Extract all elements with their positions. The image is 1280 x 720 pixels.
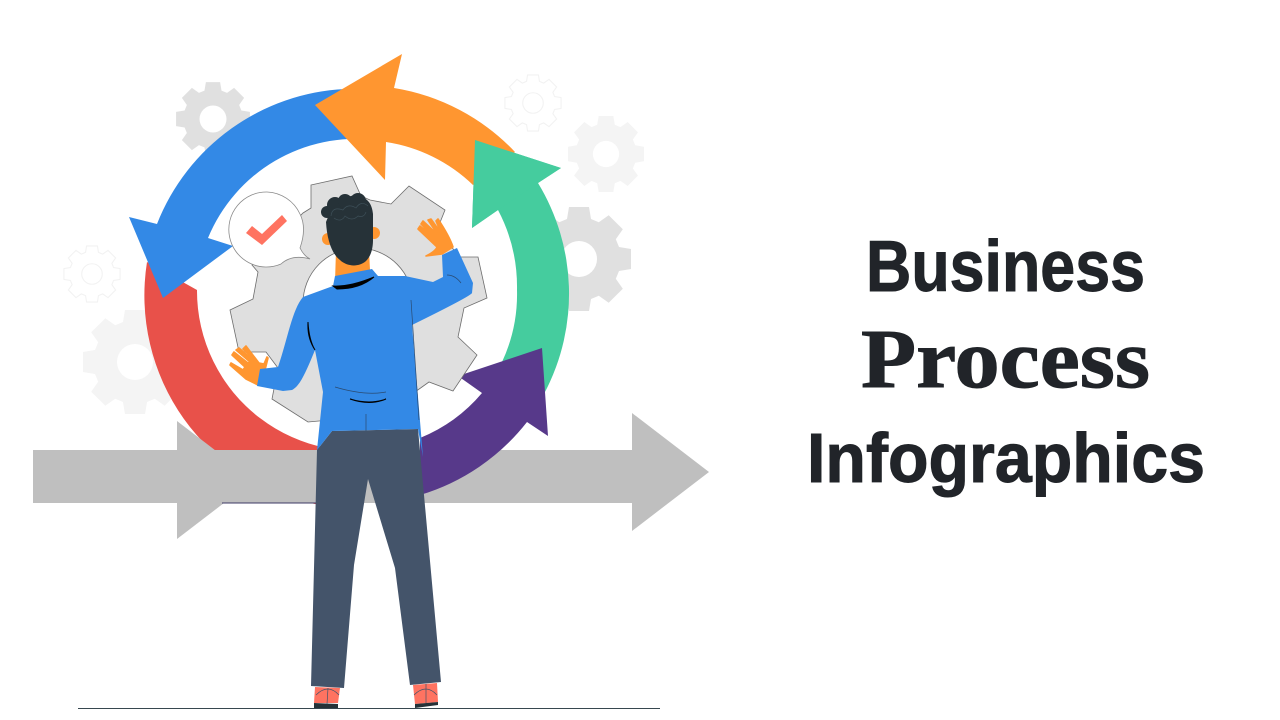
ground shadow line under arrow <box>222 502 320 504</box>
pants <box>311 429 441 688</box>
green arrow head overlap <box>472 140 561 228</box>
shirt folds <box>308 277 386 402</box>
shirt seam <box>335 275 461 431</box>
arrow segment: blue <box>129 89 375 298</box>
right hand <box>418 219 453 256</box>
arrow: grey process arrow left head <box>177 421 254 539</box>
central gear <box>230 176 487 422</box>
title line: Process: Process <box>861 313 1150 406</box>
icon: check mark <box>246 215 287 245</box>
shoes <box>314 683 438 708</box>
hair <box>321 193 373 265</box>
right shoe <box>413 683 438 704</box>
arrow segment: purple <box>420 348 548 495</box>
arrow: grey process arrow <box>33 413 709 531</box>
hair curl lines <box>331 203 368 220</box>
arrow segment: orange <box>315 54 515 185</box>
title line: Business: Business <box>866 227 1145 307</box>
speech bubble with check mark <box>229 192 310 267</box>
neck <box>335 250 378 282</box>
title line: Infographics: Infographics <box>807 419 1205 497</box>
left hand <box>230 346 268 385</box>
gear: top right outline <box>505 75 561 131</box>
arrow segment: red <box>144 262 420 505</box>
gear: right light <box>568 116 644 192</box>
shirt <box>257 248 473 457</box>
arrow segment: green <box>472 140 569 400</box>
gear: large left light <box>83 310 187 414</box>
ground line <box>78 708 660 710</box>
title <box>807 227 1205 497</box>
ears <box>322 233 334 245</box>
gear: right grey <box>527 207 631 311</box>
gear: top left grey <box>176 82 250 156</box>
gear: left outline <box>64 246 120 302</box>
person from behind <box>230 193 473 708</box>
left shoe <box>314 687 340 703</box>
